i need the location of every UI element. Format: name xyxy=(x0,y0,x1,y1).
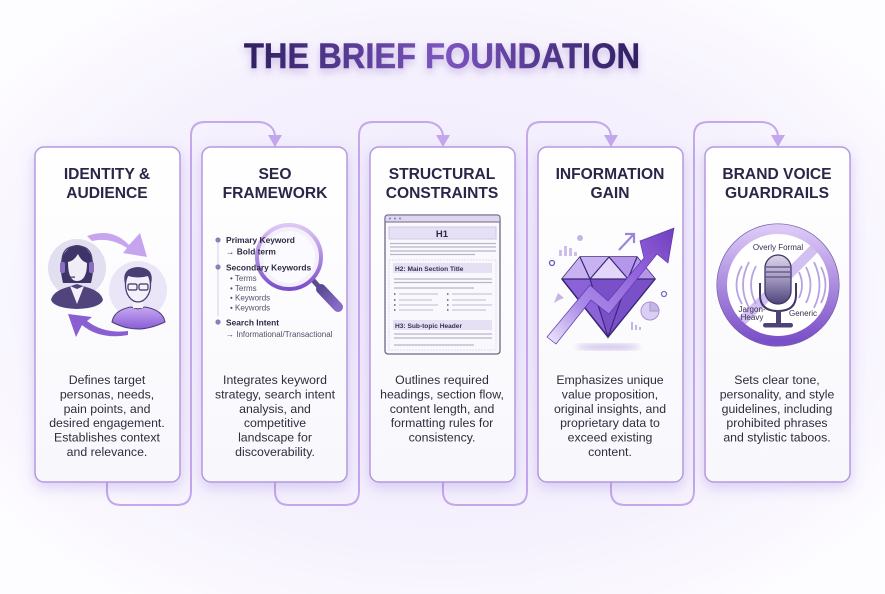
heading: identity and audience: IDENTITY & xyxy=(64,166,150,183)
description: competitive xyxy=(244,416,306,430)
keyword outline: Primary Keyword xyxy=(226,235,295,245)
description: content length, and xyxy=(390,402,494,416)
panel: seo framework xyxy=(202,147,347,482)
panel: structural constraints xyxy=(370,147,515,482)
description: prohibited phrases xyxy=(726,416,828,430)
description: strategy, search intent xyxy=(215,387,336,401)
keyword outline: → Bold term xyxy=(226,246,276,256)
keyword outline: • Terms xyxy=(230,274,257,283)
description: Emphasizes unique xyxy=(556,373,664,387)
heading: information gain: GAIN xyxy=(591,185,629,202)
description: consistency. xyxy=(409,430,475,444)
icon: page wireframe: H3: Sub-topic Header xyxy=(395,323,462,330)
icon: page wireframe: H2: Main Section Title xyxy=(395,266,464,273)
heading: information gain: INFORMATION xyxy=(556,166,664,183)
keyword outline: Secondary Keywords xyxy=(226,262,312,272)
keyword outline: Search Intent xyxy=(226,318,279,328)
description: exceed existing xyxy=(568,430,653,444)
icon: magnifying glass xyxy=(257,225,338,307)
icon: diamond and growth arrow xyxy=(547,228,674,350)
description: pain points, and xyxy=(64,402,151,416)
description: Establishes context xyxy=(54,430,161,444)
keyword outline: • Keywords xyxy=(230,304,270,312)
icon: crossed-out microphone: Heavy xyxy=(741,313,763,322)
connector: card 3 to card 4 xyxy=(443,122,618,505)
description: landscape for xyxy=(238,430,312,444)
icon: crossed-out microphone: Overly Formal xyxy=(753,243,803,252)
connector: card 4 to card 5 xyxy=(611,122,785,505)
description: personality, and style xyxy=(720,387,834,401)
title: THE BRIEF FOUNDATION xyxy=(244,37,640,76)
panel: information gain xyxy=(538,147,683,482)
description: formatting rules for xyxy=(391,416,493,430)
description: guidelines, including xyxy=(722,402,833,416)
heading: structural constraints: STRUCTURAL xyxy=(389,166,496,183)
heading: brand voice guardrails: BRAND VOICE xyxy=(722,166,832,183)
panel: identity and audience xyxy=(35,147,180,482)
description: and stylistic taboos. xyxy=(723,430,831,444)
description: Outlines required xyxy=(395,373,489,387)
icon: page wireframe xyxy=(385,215,500,354)
description: headings, section flow, xyxy=(380,387,504,401)
description: content. xyxy=(588,445,632,459)
keyword outline: • Keywords xyxy=(230,294,270,302)
description: analysis, and xyxy=(239,402,311,416)
heading: seo framework: SEO xyxy=(259,166,291,183)
connector: card 1 to card 2 xyxy=(107,122,282,505)
keyword outline xyxy=(215,235,333,339)
connector: card 2 to card 3 xyxy=(275,122,450,505)
description: discoverability. xyxy=(235,445,315,459)
keyword outline: • Terms xyxy=(230,284,257,293)
heading: brand voice guardrails: GUARDRAILS xyxy=(725,185,829,202)
icon: crossed-out microphone xyxy=(717,224,839,346)
description: value proposition, xyxy=(562,387,658,401)
description: original insights, and xyxy=(554,402,666,416)
description: Defines target xyxy=(69,373,146,387)
description: desired engagement. xyxy=(49,416,165,430)
description: Integrates keyword xyxy=(223,373,327,387)
keyword outline: → Informational/Transactional xyxy=(226,330,333,339)
description: proprietary data to xyxy=(560,416,660,430)
heading: seo framework: FRAMEWORK xyxy=(223,185,328,202)
heading: identity and audience: AUDIENCE xyxy=(66,185,148,202)
icon: crossed-out microphone: Jargon- xyxy=(738,305,766,314)
icon: crossed-out microphone: Generic xyxy=(789,309,817,318)
icon: page wireframe: H1 xyxy=(436,229,449,240)
description: personas, needs, xyxy=(60,387,154,401)
description: and relevance. xyxy=(67,445,147,459)
icon: persona exchange xyxy=(48,233,167,337)
panel: brand voice guardrails xyxy=(705,147,850,482)
heading: structural constraints: CONSTRAINTS xyxy=(386,185,498,202)
description: Sets clear tone, xyxy=(734,373,820,387)
